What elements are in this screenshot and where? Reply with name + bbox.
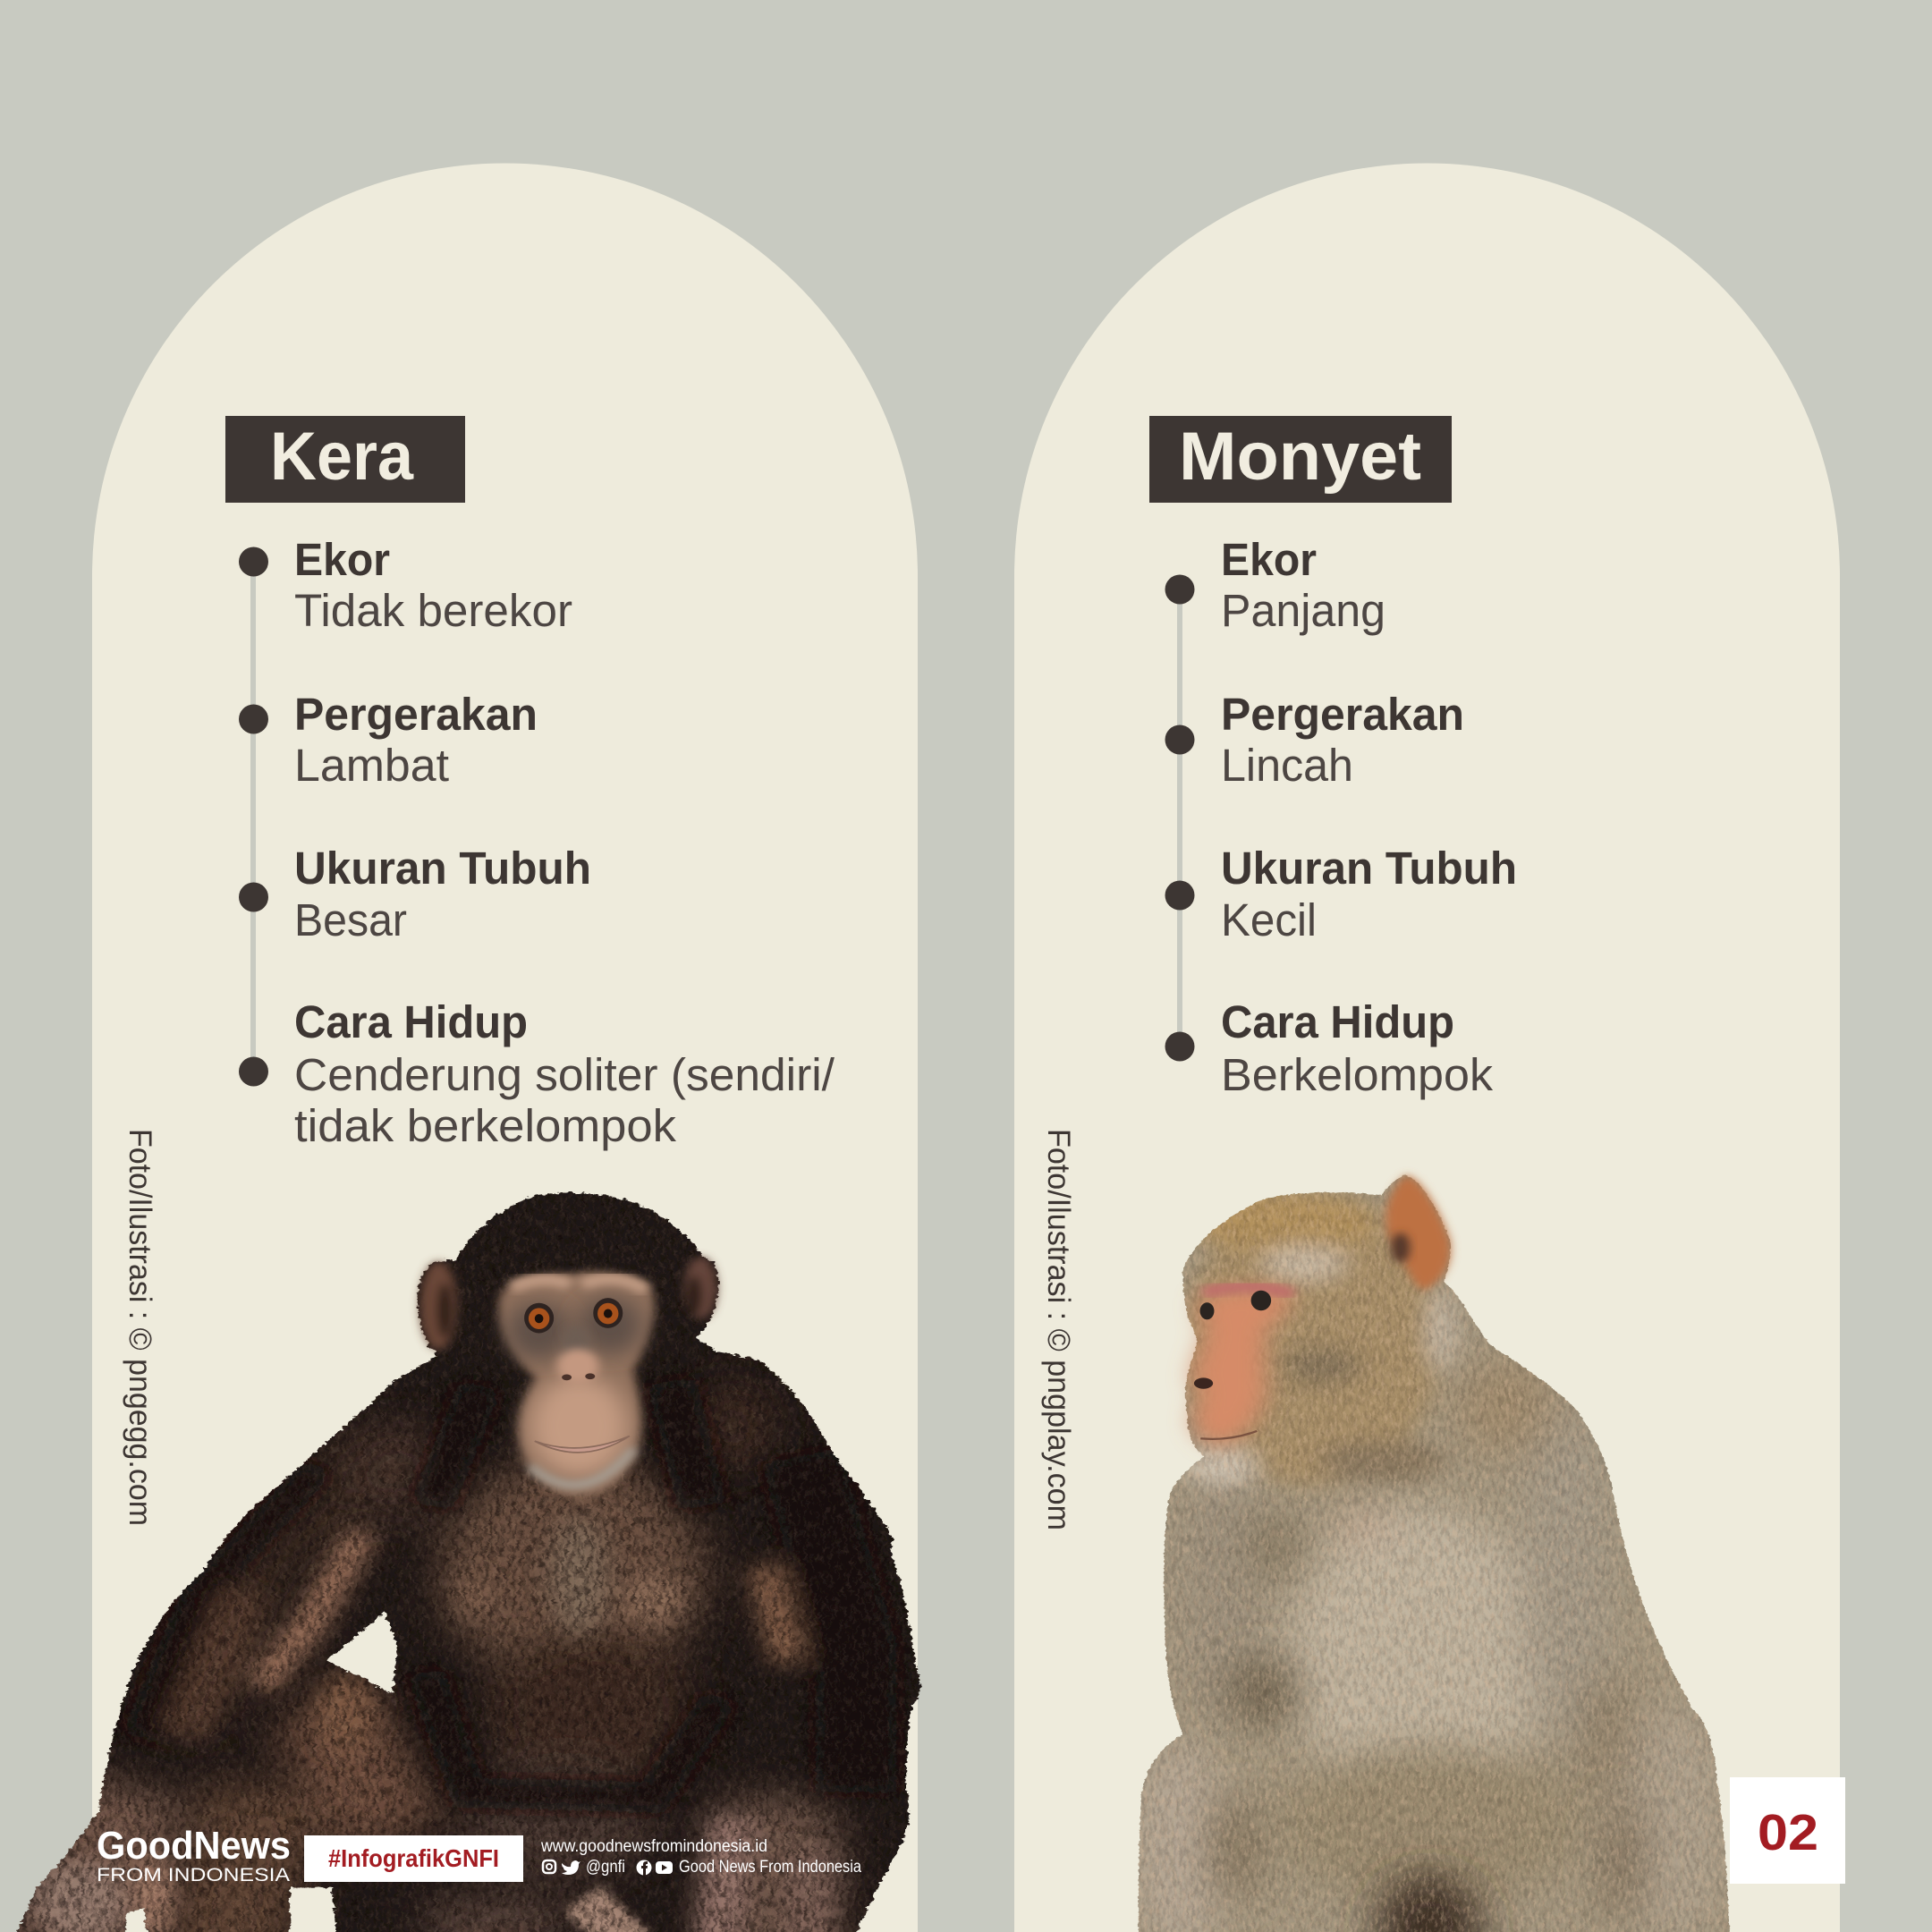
text block: Kera traits: Lambat	[294, 740, 449, 791]
fur shading	[1132, 1356, 1725, 1932]
panel: Monyet arch	[1014, 164, 1840, 1932]
text block: Monyet traits: Kecil	[1221, 894, 1317, 945]
footer: social links: www.goodnewsfromindonesia.id	[540, 1837, 767, 1856]
text block: Monyet traits: Lincah	[1221, 740, 1353, 791]
text block: Monyet traits: Cara Hidup	[1221, 996, 1454, 1047]
heading: Kera	[225, 416, 465, 503]
footer: hashtag: #InfografikGNFI	[328, 1844, 499, 1872]
panel: Kera arch	[92, 164, 918, 1932]
text block: Monyet traits: Panjang	[1221, 585, 1385, 636]
text block: Monyet traits: Berkelompok	[1221, 1049, 1494, 1100]
timeline: Kera	[239, 547, 268, 1086]
footer: GoodNews logo: FROM INDONESIA	[97, 1865, 290, 1885]
timeline: Monyet	[1165, 574, 1195, 1061]
icon: twitter	[562, 1860, 580, 1875]
heading: Kera: Kera	[270, 419, 414, 495]
dark outer fur	[801, 1456, 856, 1792]
photo credit: Kera: Foto/Ilustrasi : © pngegg.com	[123, 1129, 157, 1526]
footer: social links: Good News From Indonesia	[679, 1858, 861, 1877]
heading: Monyet	[1149, 416, 1452, 503]
text block: Monyet traits: Ekor	[1221, 534, 1317, 585]
text block: Monyet traits: Pergerakan	[1221, 689, 1464, 740]
icon: facebook	[637, 1860, 651, 1876]
eyes	[524, 1298, 623, 1333]
text block: Kera traits: Cara Hidup	[294, 996, 528, 1047]
text block: Kera traits: Besar	[294, 894, 407, 945]
footer: social links	[540, 1837, 861, 1877]
face	[499, 1271, 654, 1496]
text block: Kera traits: Ekor	[294, 534, 390, 585]
fur streaks	[16, 1191, 922, 1932]
illustration: chimpanzee	[16, 1191, 922, 1932]
footer: hashtag	[304, 1835, 523, 1882]
ear	[1385, 1175, 1451, 1291]
footer: social links: @gnfi	[586, 1858, 625, 1877]
nose	[557, 1349, 598, 1383]
footer: GoodNews logo	[97, 1824, 291, 1885]
heading: Monyet: Monyet	[1179, 419, 1421, 495]
photo credit: Monyet: Foto/Ilustrasi : © pngplay.com	[1041, 1129, 1076, 1530]
fur shading	[55, 1381, 776, 1932]
text block: Kera traits: Cenderung soliter (sendiri/	[294, 1049, 835, 1100]
text block: Kera traits	[294, 534, 835, 1151]
mouth	[535, 1436, 630, 1453]
illustration: rhesus macaque	[1138, 1171, 1730, 1932]
text block: Kera traits: Tidak berekor	[294, 585, 572, 636]
icon: instagram	[543, 1860, 555, 1873]
page number	[1730, 1777, 1845, 1884]
page number: 02	[1758, 1804, 1818, 1861]
text block: Kera traits: Ukuran Tubuh	[294, 843, 591, 894]
text block: Monyet traits: Ukuran Tubuh	[1221, 843, 1517, 894]
icon: youtube	[656, 1861, 673, 1874]
fur streaks	[1138, 1175, 1730, 1932]
text block: Kera traits: tidak berkelompok	[294, 1100, 677, 1151]
text block: Monyet traits	[1221, 534, 1517, 1100]
footer: GoodNews logo: GoodNews	[97, 1824, 291, 1868]
face	[1191, 1286, 1292, 1446]
text block: Kera traits: Pergerakan	[294, 689, 538, 740]
head	[1180, 1191, 1453, 1487]
ears	[420, 1257, 717, 1350]
